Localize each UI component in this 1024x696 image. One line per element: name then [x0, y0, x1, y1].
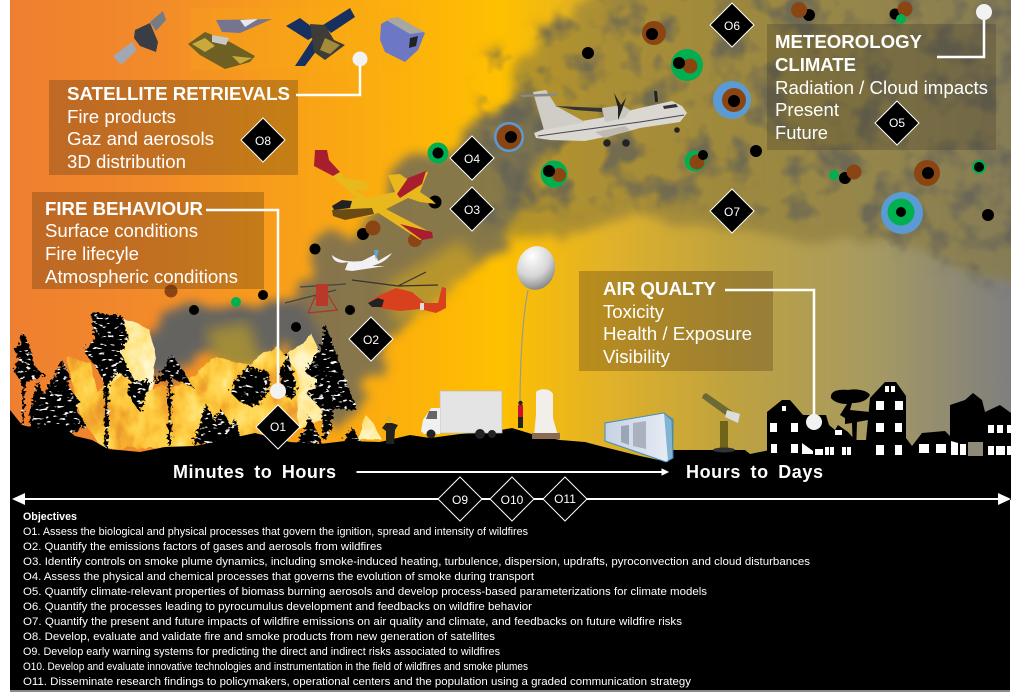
objectives list: O4. Assess the physical and chemical processes that governs the evolution of smoke during transport [23, 571, 534, 583]
panel: fire behaviour [32, 192, 264, 289]
heading: CLIMATE [775, 55, 856, 75]
objectives heading: Objectives [23, 511, 77, 523]
list: Toxicity [603, 302, 664, 322]
badge O1: O1 [270, 420, 286, 434]
umbrella pine [831, 389, 870, 455]
satellite image backdrop [190, 8, 425, 70]
heading: SATELLITE RETRIEVALS [67, 84, 290, 104]
arrow: cross-cutting double arrow [12, 493, 1011, 505]
icon: research aircraft ATR [520, 90, 687, 147]
particles: upper right plume [540, 2, 994, 234]
timescale label: minutes to hours: Minutes to Hours [173, 462, 336, 482]
panel: air quality [579, 271, 773, 371]
objectives list: O2. Quantify the emissions factors of gases and aerosols from wildfires [23, 541, 383, 553]
lower edge rule [10, 690, 1010, 692]
icon: weather balloon [513, 243, 559, 405]
objectives text block [23, 511, 811, 688]
badge O6: O6 [724, 19, 740, 33]
badge O10: O10 [501, 493, 524, 507]
list: Fire products [67, 107, 176, 127]
connector: meteorology [937, 4, 992, 57]
badge O5 [875, 101, 919, 145]
panel: meteorology climate [767, 24, 996, 150]
heading: METEOROLOGY [775, 32, 922, 52]
objectives list: O10. Develop and evaluate innovative technologies and instrumentation in the field of wildfires and smoke plumes [23, 661, 528, 673]
list [775, 78, 988, 143]
icon: water bomber aircraft [314, 150, 436, 240]
objectives list: O1. Assess the biological and physical processes that govern the ignition, spread and intensity of wildfires [23, 526, 528, 538]
heading: AIR QUALTY [603, 279, 716, 299]
objectives list: O8. Develop, evaluate and validate fire and smoke products from new generation of satellites [23, 631, 496, 643]
objectives list: O11. Disseminate research findings to policymakers, operational centers and the population using a graded communication strategy [23, 676, 692, 688]
badge O9 [438, 477, 482, 521]
list: 3D distribution [67, 152, 186, 172]
objectives list: O6. Quantify the processes leading to pyrocumulus development and feedbacks on wildfire behavior [23, 601, 532, 613]
objectives list: O7. Quantify the present and future impacts of wildfire emissions on air quality and climate, and feedbacks on future wildfire risks [23, 616, 683, 628]
list [67, 107, 214, 172]
list [603, 302, 752, 367]
village silhouette [767, 382, 1011, 460]
list: Surface conditions [45, 221, 198, 241]
panel: satellite retrievals [49, 80, 298, 175]
satellite 1 [113, 11, 166, 65]
heading: FIRE BEHAVIOUR [45, 199, 203, 219]
particles: left and central plume [164, 122, 524, 332]
icon: person [518, 401, 523, 428]
trees silhouettes [14, 312, 362, 449]
list: Gaz and aerosols [67, 129, 214, 149]
badge O3: O3 [464, 203, 480, 217]
satellite 2 [188, 19, 272, 69]
fire flames [68, 317, 382, 448]
badge O9: O9 [452, 493, 468, 507]
icon: field container laboratory [605, 413, 674, 462]
heading [775, 32, 922, 75]
icon: rescue helicopter [352, 272, 446, 313]
objectives list: O5. Quantify climate-relevant properties of biomass burning aerosols and develop process-based parameterizations for climate models [23, 586, 708, 598]
ground silhouette [10, 410, 1011, 690]
list: Atmospheric conditions [45, 267, 238, 287]
badge O4 [450, 136, 494, 180]
badge O10 [490, 477, 534, 521]
satellites [113, 8, 425, 69]
icon: sun photometer telescope [702, 393, 740, 452]
badge O6 [710, 3, 754, 47]
smoke plume [125, 0, 1024, 432]
connector: air quality [725, 290, 822, 430]
arrow: timescale [357, 469, 668, 475]
tree cluster left [14, 332, 46, 426]
list [45, 221, 238, 287]
badge O7: O7 [724, 205, 740, 219]
objectives list: O9. Develop early warning systems for predicting the direct and indirect risks associated to wildfires [23, 646, 500, 658]
list: Fire lifecyle [45, 244, 139, 264]
badge O11 [543, 477, 587, 521]
objectives list: O3. Identify controls on smoke plume dynamics, including smoke-induced heating, turbulence, dispersion, updrafts, pyroconvection and cloud disturbances [23, 556, 811, 568]
timescale label: hours to days: Hours to Days [686, 462, 823, 482]
satellite 3 [286, 8, 355, 66]
icon: truck [421, 391, 502, 439]
icon: research aircraft small [332, 250, 392, 271]
list: Health / Exposure [603, 324, 752, 344]
badge O8: O8 [255, 134, 271, 148]
connector: satellite [296, 52, 368, 95]
icon: drone [285, 284, 346, 313]
badge O2: O2 [363, 333, 379, 347]
badge O2 [349, 317, 393, 361]
satellite 4 [380, 17, 425, 62]
icon: firefighter [382, 416, 398, 444]
badge O5: O5 [889, 116, 905, 130]
badge O4: O4 [464, 152, 480, 166]
badge O3 [450, 187, 494, 231]
connector: fire behaviour [206, 210, 286, 399]
badge O11: O11 [554, 492, 576, 506]
objective badges in the scene [241, 3, 919, 449]
badge O1 [256, 405, 300, 449]
objectives list [23, 526, 811, 688]
badge O7 [710, 189, 754, 233]
sky background gradient [10, 0, 1011, 500]
list: Visibility [603, 347, 670, 367]
badge O8 [241, 118, 285, 162]
list: Future [775, 123, 828, 143]
icon: lidar instrument [532, 389, 560, 439]
list: Radiation / Cloud impacts [775, 78, 988, 98]
list: Present [775, 100, 839, 120]
